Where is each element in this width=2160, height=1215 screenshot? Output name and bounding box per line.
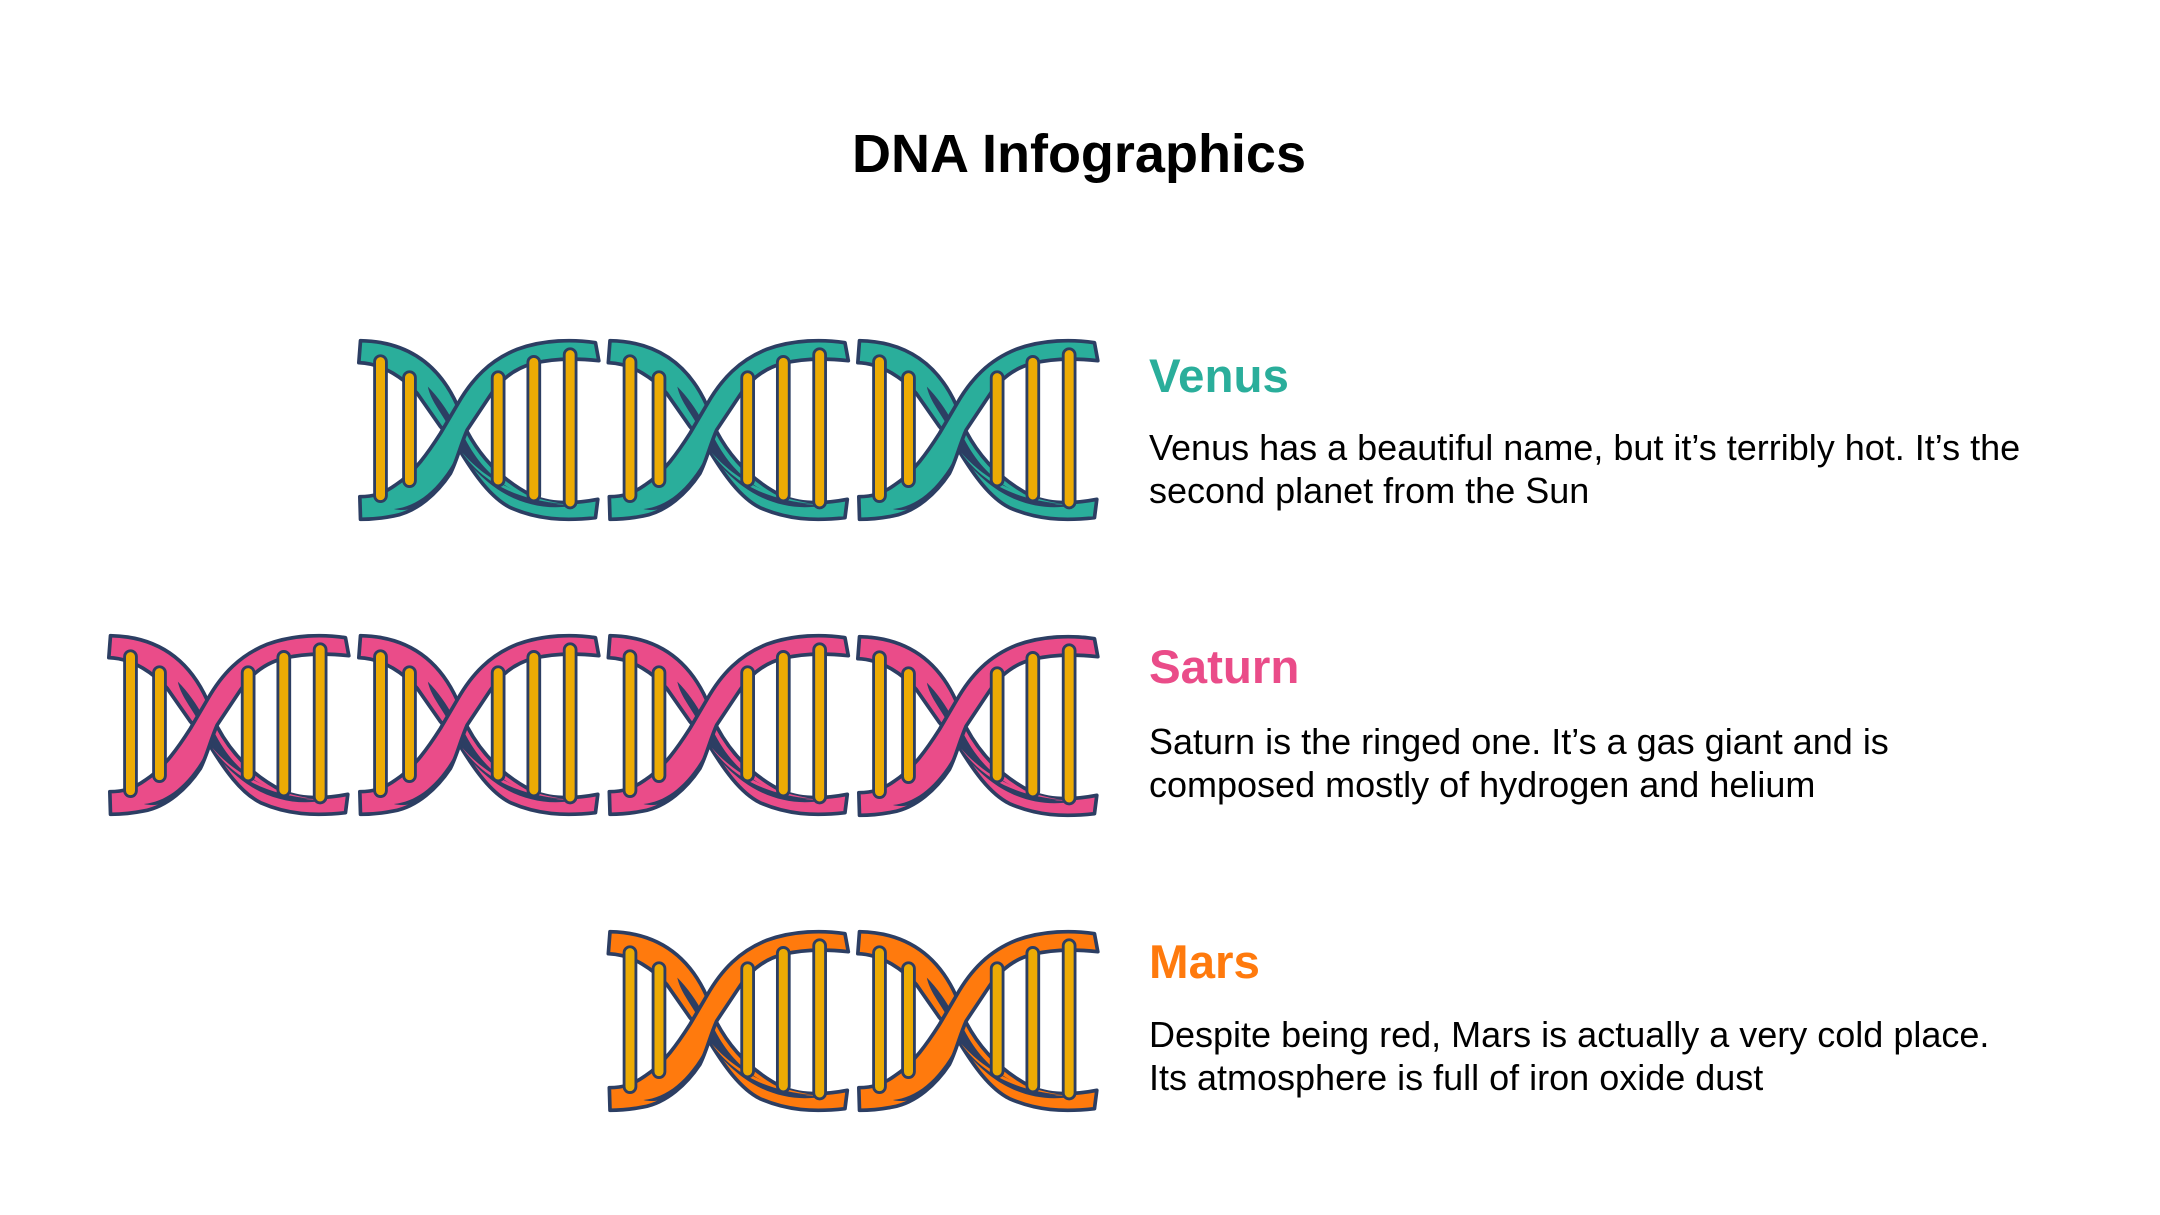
DNA unit: Mars 2 — [858, 932, 1098, 1110]
DNA unit: Venus 1 — [359, 341, 599, 519]
DNA row: Venus — [359, 341, 1098, 519]
title: DNA Infographics — [852, 124, 1306, 184]
DNA unit: Saturn 4 — [858, 637, 1098, 815]
DNA unit: Saturn 3 — [608, 636, 848, 814]
text: Venus description: second planet from the Sun — [1149, 470, 1589, 511]
DNA row: Mars — [608, 932, 1098, 1110]
DNA unit: Mars 1 — [608, 932, 848, 1110]
DNA unit: Venus 2 — [608, 341, 848, 519]
text: Saturn description — [1149, 721, 1889, 805]
heading: Mars: Mars — [1149, 936, 1260, 989]
text: Mars description: Despite being red, Mars is actually a very cold place. — [1149, 1014, 1989, 1055]
text: Saturn description: composed mostly of hydrogen and helium — [1149, 764, 1815, 805]
text: Venus description: Venus has a beautiful name, but it’s terribly hot. It’s the — [1149, 427, 2020, 468]
DNA unit: Venus 3 — [858, 341, 1098, 519]
text: Mars description: Its atmosphere is full of iron oxide dust — [1149, 1057, 1763, 1098]
DNA unit: Saturn 2 — [359, 636, 599, 814]
text: Venus description — [1149, 427, 2020, 511]
text: Saturn description: Saturn is the ringed one. It’s a gas giant and is — [1149, 721, 1889, 762]
DNA row: Saturn — [109, 636, 1098, 815]
DNA unit: Saturn 1 — [109, 636, 349, 814]
heading: Saturn: Saturn — [1149, 641, 1299, 694]
text: Mars description — [1149, 1014, 1989, 1098]
heading: Venus: Venus — [1149, 350, 1289, 403]
